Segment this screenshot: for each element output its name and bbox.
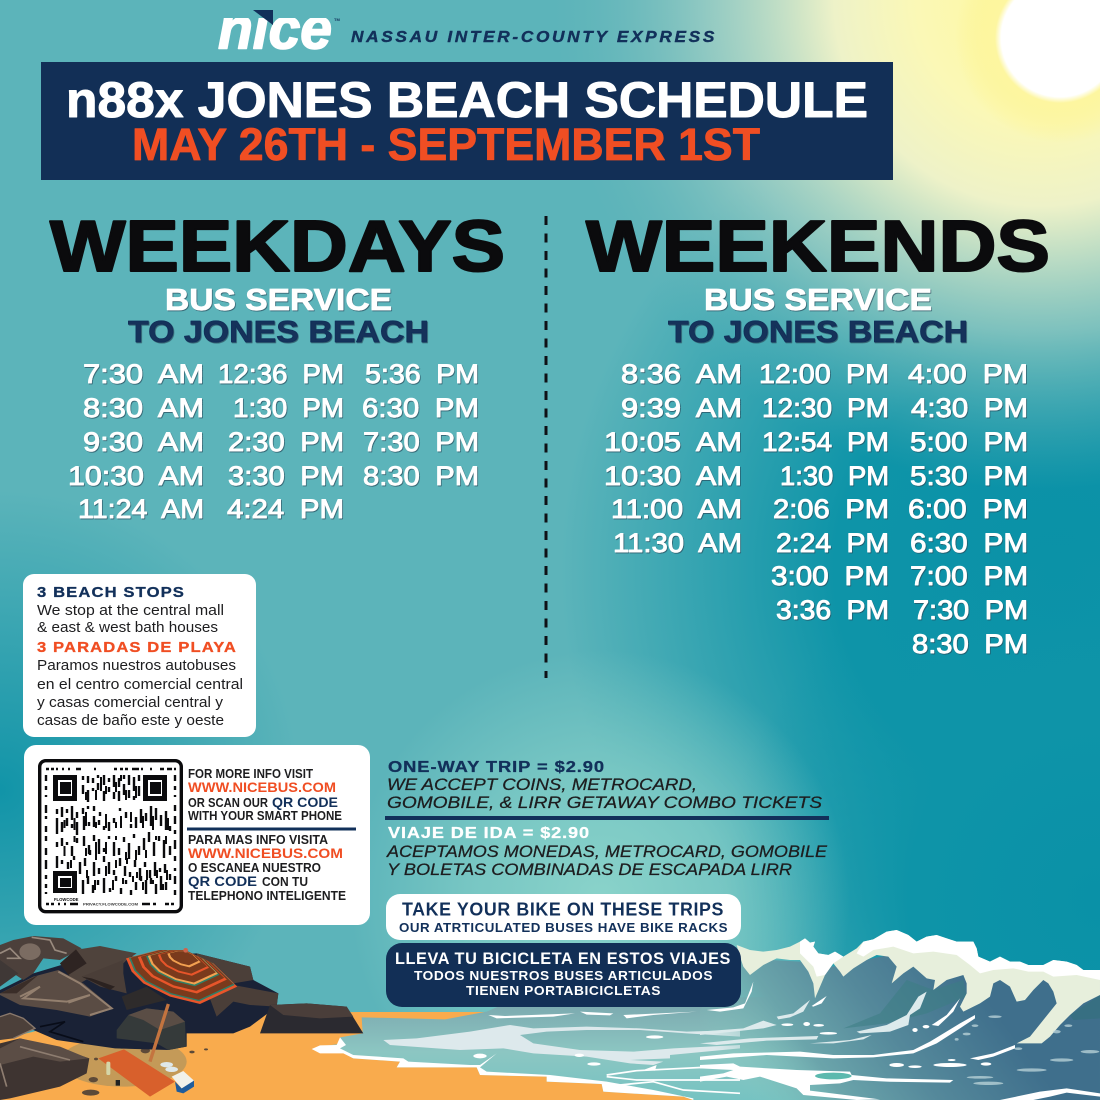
logo: nice: TM <box>334 17 340 22</box>
subheading: weekdays bus service <box>128 282 429 349</box>
fares text: Y BOLETAS COMBINADAS DE ESCAPADA LIRR <box>387 860 792 879</box>
weekday departure times: 3:30 PM <box>228 461 344 491</box>
text: more info: OR SCAN OUR <box>188 796 268 810</box>
text: more info <box>187 767 356 903</box>
heading: schedule title: n88x JONES BEACH SCHEDULE <box>66 72 868 128</box>
wave body <box>700 953 1100 1100</box>
weekday departure times: 2:30 PM <box>228 427 344 457</box>
pill: lleva tu bicicleta: LLEVA TU BICICLETA EN ESTOS VIAJES <box>395 950 731 968</box>
dark rock mass <box>0 953 278 1050</box>
text: more info: WITH YOUR SMART PHONE <box>188 809 342 823</box>
weekday departure times: 9:30 AM <box>83 427 204 457</box>
panel: beach stops: & east & west bath houses <box>37 620 218 636</box>
foam streaks <box>700 982 1100 1100</box>
QR code: FLOWCODE <box>54 897 79 902</box>
weekend departure times: 2:24 PM <box>776 528 889 558</box>
logo: nice <box>218 10 340 50</box>
foam crest <box>737 930 1100 1043</box>
text: more info: O ESCANEA NUESTRO <box>188 861 321 875</box>
rock: lower left <box>0 1038 89 1100</box>
weekday departure times: 5:36 PM <box>365 359 479 389</box>
divider: dashed line <box>544 216 548 678</box>
weekday departure times: 1:30 PM <box>233 393 344 423</box>
rock: small centre <box>117 1008 186 1050</box>
tagline: Nassau Inter-County Express: NASSAU INTER-COUNTY EXPRESS <box>351 29 717 46</box>
panel: beach stops <box>23 574 256 737</box>
weekday departure times: 10:30 AM <box>68 461 204 491</box>
sand shadow <box>60 1037 187 1087</box>
QR code <box>40 761 181 912</box>
text: more info: TELEPHONO INTELIGENTE <box>188 889 346 903</box>
weekday departure times: 11:24 AM <box>78 494 204 524</box>
rock: main <box>0 970 113 1017</box>
weekend departure times <box>604 359 1028 659</box>
panel: beach stops: en el centro comercial central <box>37 677 243 693</box>
rock: back middle <box>60 946 137 983</box>
weekend departure times: 11:00 AM <box>611 494 742 524</box>
bottle <box>106 1062 110 1075</box>
panel: QR code and website <box>24 745 370 925</box>
shallow water and shore foam <box>312 993 1100 1100</box>
pill: lleva tu bicicleta: TIENEN PORTABICICLETAS <box>466 983 661 998</box>
subheading: weekdays bus service: TO JONES BEACH <box>128 314 429 349</box>
weekday departure times: 6:30 PM <box>362 393 479 423</box>
title banner <box>41 62 893 180</box>
towel <box>98 1049 175 1097</box>
QR code: PRIVACY.FLOWCODE.COM <box>83 902 139 906</box>
pill: take your bike <box>386 894 741 940</box>
weekday departure times: 4:24 PM <box>227 494 344 524</box>
fares text <box>385 759 829 879</box>
weekend departure times: 10:05 AM <box>604 427 742 457</box>
weekday departure times: 7:30 PM <box>363 427 479 457</box>
rock: far right <box>260 1003 363 1033</box>
rock: mid left <box>0 1013 35 1040</box>
panel: beach stops: We stop at the central mall <box>37 603 224 619</box>
weekday departure times: 12:36 PM <box>218 359 344 389</box>
weekend departure times: 3:00 PM <box>771 561 889 591</box>
pill: take your bike: TAKE YOUR BIKE ON THESE TRIPS <box>402 900 724 920</box>
weekend departure times: 4:00 PM <box>908 359 1028 389</box>
weekend departure times: 12:30 PM <box>762 393 889 423</box>
fares text: ACEPTAMOS MONEDAS, METROCARD, GOMOBILE <box>386 842 828 861</box>
weekend departure times: 6:30 PM <box>910 528 1028 558</box>
rock: behind umbrella <box>197 953 253 983</box>
pill: lleva tu bicicleta: TODOS NUESTROS BUSES ARTICULADOS <box>414 968 713 983</box>
weekday departure times: 8:30 PM <box>363 461 479 491</box>
weekend departure times: 12:00 PM <box>759 359 889 389</box>
pebbles <box>82 1044 208 1096</box>
text: more info: CON TU <box>262 875 308 889</box>
weekend departure times: 5:00 PM <box>910 427 1028 457</box>
weekend departure times: 10:30 AM <box>604 461 742 491</box>
teal patch <box>815 1073 852 1079</box>
panel: beach stops: 3 BEACH STOPS <box>37 584 185 601</box>
rock: top left <box>0 936 82 987</box>
fares text: VIAJE DE IDA = $2.90 <box>388 825 590 842</box>
text: more info: FOR MORE INFO VISIT <box>188 767 313 781</box>
umbrella pole <box>150 1004 168 1062</box>
subheading: weekends bus service <box>668 282 968 349</box>
weekend departure times: 8:30 PM <box>912 629 1028 659</box>
phone <box>116 1080 120 1086</box>
weekend departure times: 9:39 AM <box>621 393 742 423</box>
weekend departure times: 2:06 PM <box>773 494 889 524</box>
text: more info: WWW.NICEBUS.COM <box>188 845 343 861</box>
weekend departure times: 6:00 PM <box>908 494 1028 524</box>
umbrella canopy <box>126 948 237 1004</box>
heading: weekdays: WEEKDAYS <box>50 207 505 287</box>
weekday departure times: 7:30 AM <box>83 359 204 389</box>
weekday departure times <box>68 359 479 524</box>
panel: beach stops: casas de baño este y oeste <box>37 713 224 729</box>
icon: sun <box>955 0 1100 143</box>
panel: beach stops: 3 PARADAS DE PLAYA <box>37 639 237 656</box>
weekend departure times: 1:30 PM <box>780 461 889 491</box>
heading: weekends: WEEKENDS <box>586 207 1050 287</box>
subheading: weekends bus service: BUS SERVICE <box>704 282 932 317</box>
flip flops <box>160 1062 178 1072</box>
ocean wave <box>700 930 1100 1100</box>
text: more info: PARA MAS INFO VISITA <box>188 833 328 847</box>
fares text: GOMOBILE, & LIRR GETAWAY COMBO TICKETS <box>387 793 823 812</box>
pill: take your bike: OUR ATRTICULATED BUSES HAVE BIKE RACKS <box>399 920 728 935</box>
subheading: weekdays bus service: BUS SERVICE <box>165 282 392 317</box>
weekend departure times: 7:30 PM <box>913 595 1028 625</box>
weekend departure times: 5:30 PM <box>910 461 1028 491</box>
heading: dates: MAY 26TH - SEPTEMBER 1ST <box>132 119 760 170</box>
weekday departure times: 8:30 AM <box>83 393 204 423</box>
panel: beach stops: Paramos nuestros autobuses <box>37 658 236 674</box>
illustration: rocks and beach items <box>0 936 363 1100</box>
wave shading <box>843 980 967 1028</box>
panel: beach stops: y casas comercial central y <box>37 695 224 711</box>
weekend departure times: 12:54 PM <box>762 427 889 457</box>
text: more info: WWW.NICEBUS.COM <box>188 779 336 795</box>
pill: lleva tu bicicleta <box>386 943 741 1007</box>
weekend departure times: 4:30 PM <box>911 393 1028 423</box>
weekend departure times: 11:30 AM <box>613 528 742 558</box>
text: more info: QR CODE <box>188 873 257 889</box>
weekend departure times: 8:36 AM <box>621 359 742 389</box>
text: more info: QR CODE <box>272 794 338 810</box>
sand <box>0 1012 700 1100</box>
weekend departure times: 3:36 PM <box>776 595 889 625</box>
fares text: WE ACCEPT COINS, METROCARD, <box>387 775 697 794</box>
fares text: ONE-WAY TRIP = $2.90 <box>388 759 605 776</box>
subheading: weekends bus service: TO JONES BEACH <box>668 314 968 349</box>
cooler <box>172 1071 194 1093</box>
weekend departure times: 7:00 PM <box>910 561 1028 591</box>
